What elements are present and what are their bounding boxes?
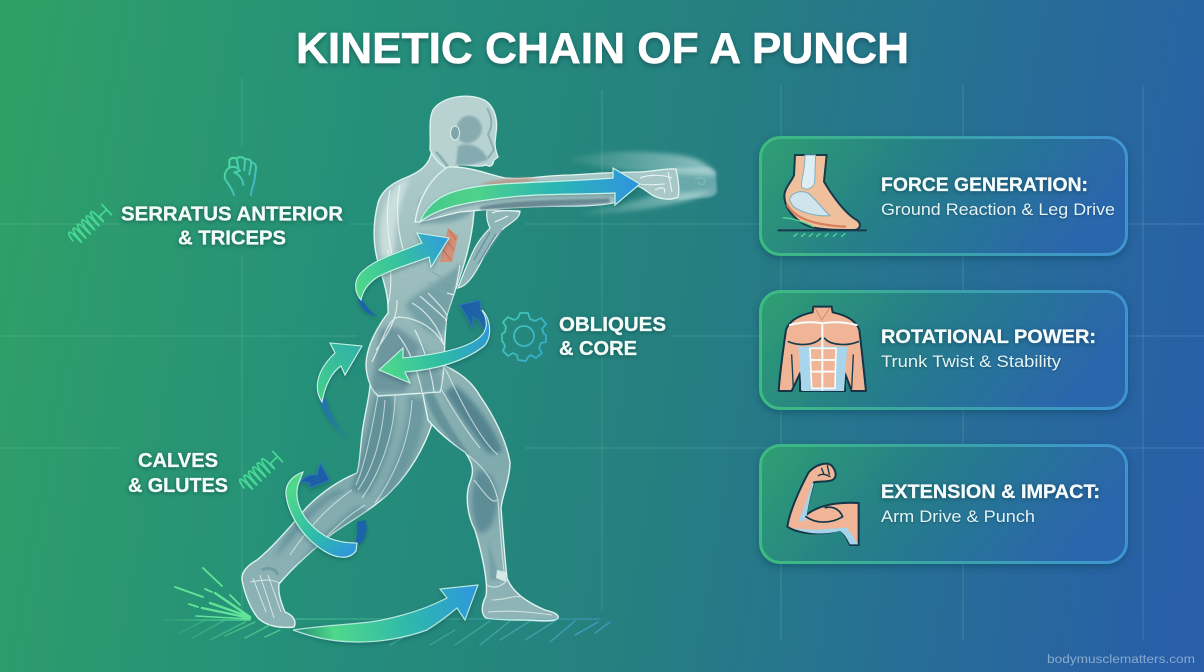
heading: EXTENSION & IMPACT: (881, 482, 1100, 503)
label: serratus anterior and triceps: & TRICEPS (178, 228, 286, 250)
head (430, 96, 498, 170)
icon: torso (779, 307, 866, 391)
ground hatching (163, 619, 610, 645)
arrow: punching arm (420, 168, 640, 222)
icon: gear (502, 313, 546, 361)
arrow: torso spiral (356, 233, 449, 316)
guard arm (458, 210, 520, 288)
icon: fist (225, 157, 256, 195)
label: serratus anterior and triceps (121, 204, 344, 250)
label: obliques and core: OBLIQUES (559, 314, 666, 336)
label: calves and glutes (128, 450, 228, 497)
back leg (242, 372, 440, 627)
label: obliques and core (559, 314, 666, 360)
arrow: obliques wrap (379, 300, 490, 383)
subtitle: Ground Reaction & Leg Drive (881, 200, 1115, 219)
front leg (420, 365, 558, 621)
icon: spring left (67, 203, 111, 246)
panel: rotational power (760, 292, 1126, 408)
label: obliques and core: & CORE (559, 338, 637, 360)
label: serratus anterior and triceps: SERRATUS ANTERIOR (121, 204, 344, 226)
arrow: hip rising (317, 343, 362, 442)
icon: foot (778, 155, 866, 236)
subtitle: Arm Drive & Punch (881, 507, 1035, 526)
label: calves and glutes: CALVES (138, 450, 218, 472)
label: calves and glutes: & GLUTES (128, 475, 228, 497)
panel: force generation (760, 138, 1126, 254)
arrow: calf spiral (286, 463, 367, 557)
icon: flexed arm (787, 464, 859, 545)
punching arm (415, 167, 679, 222)
motion blur of punch (565, 152, 717, 214)
subtitle: Trunk Twist & Stability (881, 352, 1062, 371)
heading: FORCE GENERATION: (881, 175, 1088, 196)
heading: ROTATIONAL POWER: (881, 327, 1096, 348)
icon: spring right (238, 450, 282, 493)
title: KINETIC CHAIN OF A PUNCH (296, 24, 909, 73)
figure: anatomical boxer (242, 96, 679, 627)
panel: extension and impact (760, 446, 1126, 562)
watermark: bodymusclematters.com (1047, 654, 1195, 666)
torso (366, 150, 474, 396)
icon: impact burst at back foot (175, 568, 250, 619)
arrow: ground drive (293, 585, 478, 642)
